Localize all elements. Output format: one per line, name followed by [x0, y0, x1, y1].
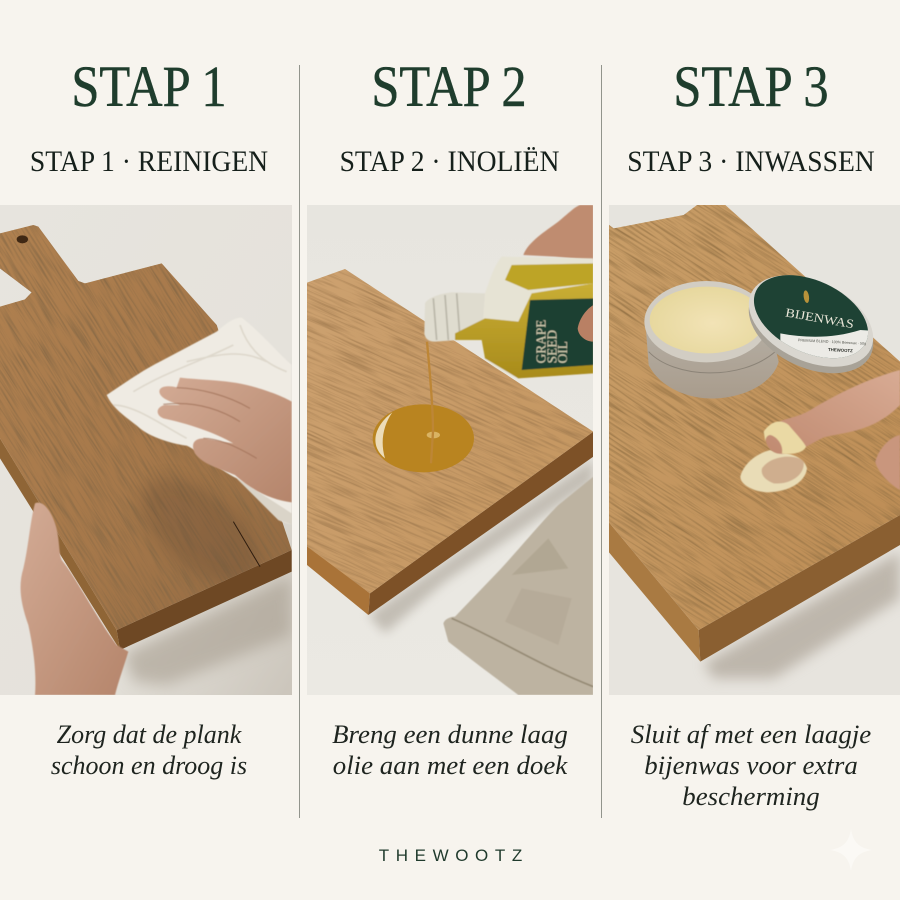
- brand wordmark: THEWOOTZ: [379, 846, 529, 865]
- subheading: step 1: STAP 1 · REINIGEN: [30, 145, 268, 178]
- finger with wax: [764, 370, 900, 454]
- caption: step 1: schoon en droog is: [51, 751, 247, 780]
- oil stream: [427, 342, 433, 463]
- caption: step 3: bescherming: [682, 781, 820, 811]
- panel: step 1: [0, 54, 292, 780]
- tin lid with label: THEWOOTZ: [828, 347, 853, 353]
- caption: step 2: olie aan met een doek: [333, 750, 567, 780]
- bottle label: SEED: [545, 330, 560, 363]
- subheading: step 3: STAP 3 · INWASSEN: [627, 145, 875, 178]
- cloth: [107, 318, 292, 524]
- caption: step 3: Sluit af met een laagje: [631, 719, 871, 749]
- caption: step 3: [631, 719, 871, 811]
- board top: [0, 225, 292, 630]
- oil puddle: [373, 404, 474, 472]
- icon: sparkle: [829, 828, 873, 872]
- board top: [609, 205, 900, 630]
- bottle label: [522, 298, 593, 370]
- photo: cleaning board with cloth: [0, 205, 292, 695]
- bottle label: GRAPE: [534, 320, 549, 363]
- hand pouring: [523, 205, 593, 260]
- photo: applying beeswax: [609, 205, 900, 695]
- heading: step 3: STAP 3: [673, 54, 829, 119]
- heading: step 2: STAP 2: [371, 54, 527, 119]
- oil bottle: [424, 257, 593, 378]
- heading: step 1: STAP 1: [71, 54, 227, 119]
- icon: bee: [803, 290, 810, 303]
- board sides: [117, 550, 292, 650]
- board sides: [305, 543, 370, 615]
- bottle label: OIL: [555, 341, 570, 363]
- panel: step 2: [307, 54, 593, 780]
- open tin of beeswax: [644, 281, 779, 398]
- photo: pouring oil: [307, 205, 593, 695]
- wax smear: [740, 450, 807, 492]
- caption: step 1: Zorg dat de plank: [57, 720, 241, 749]
- subheading: step 2: STAP 2 · INOLIËN: [340, 145, 559, 178]
- tin lid with label: [748, 275, 874, 374]
- linen cloth: [443, 477, 593, 695]
- caption: step 3: bijenwas voor extra: [644, 750, 858, 780]
- tin lid with label: BIJENWAS: [784, 305, 855, 331]
- caption: step 1: [51, 720, 247, 780]
- tin lid with label: PREMIUM BLEND · 100% Beeswax · 50g: [798, 338, 866, 346]
- caption: step 2: [332, 719, 568, 780]
- hand on cloth: [158, 378, 292, 502]
- fingertip: [578, 305, 593, 342]
- caption: step 2: Breng een dunne laag: [332, 719, 568, 749]
- board top: [307, 269, 593, 594]
- board sides: [607, 520, 700, 662]
- hand holding board: [21, 503, 128, 695]
- second finger: [875, 435, 900, 490]
- panel: step 3: [609, 54, 900, 811]
